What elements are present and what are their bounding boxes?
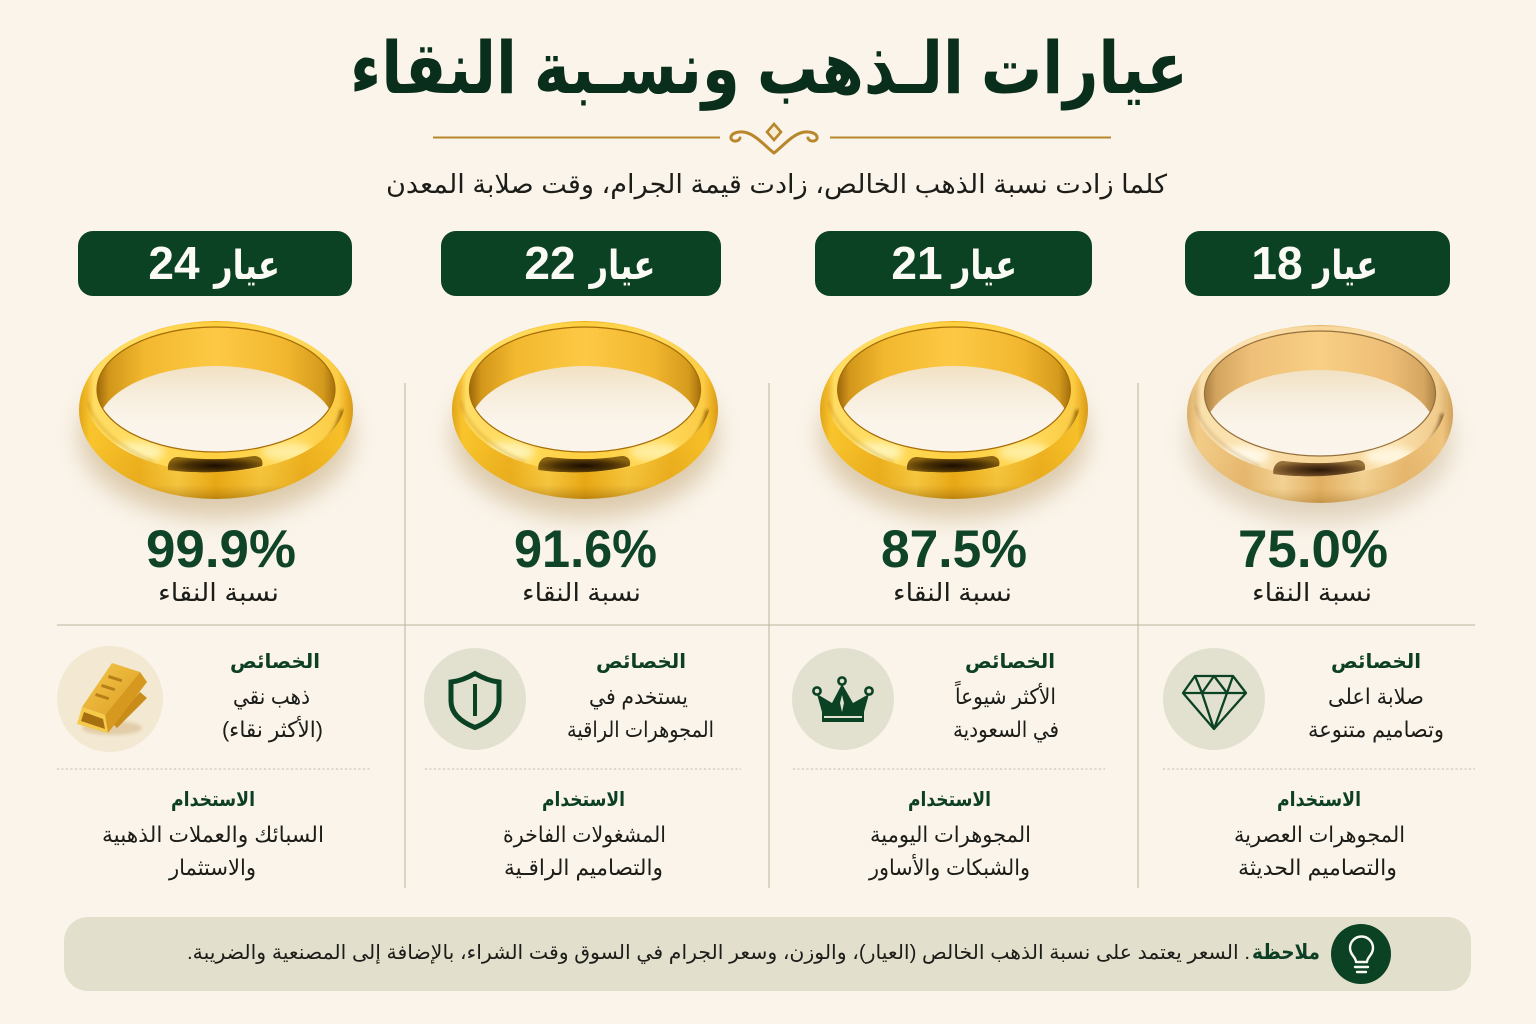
badge: 24 karat (78, 231, 352, 296)
icon: gold bar (57, 646, 163, 752)
note bar (64, 917, 1471, 991)
properties text (567, 684, 714, 742)
title: عيارات الـذهب ونسـبة النقاء (350, 29, 1188, 111)
properties text: المجوهرات الراقية (567, 717, 714, 742)
properties text: ذهب نقي (233, 684, 310, 710)
use text: المجوهرات اليومية (870, 822, 1031, 847)
properties text: صلابة اعلى (1328, 684, 1424, 709)
panel: 24 karat (57, 231, 353, 880)
badge: 21 karat: 21 (891, 237, 943, 289)
use text: المجوهرات العصرية (1234, 822, 1405, 847)
use text: والاستثمار (168, 855, 256, 880)
panel: 18 karat (1163, 231, 1453, 881)
use text (868, 822, 1031, 880)
percent: 99.9%: 99.9% (146, 520, 296, 579)
icon: diamond (1163, 648, 1265, 750)
use heading: الاستخدام (1277, 789, 1361, 811)
purity label: نسبة النقاء (1252, 579, 1372, 607)
use text: والتصاميم الراقـية (504, 855, 663, 881)
purity label: نسبة النقاء (522, 579, 641, 607)
properties text: يستخدم في (589, 684, 688, 710)
badge: 24 karat: عيار (212, 244, 280, 289)
panel: 21 karat (792, 231, 1092, 880)
purity label: نسبة النقاء (158, 579, 279, 607)
properties text: (الأكثر نقاء) (222, 716, 323, 742)
column dividers (57, 383, 1475, 888)
properties text: وتصاميم متنوعة (1308, 717, 1444, 743)
subtitle: كلما زادت نسبة الذهب الخالص، زادت قيمة الجرام، وقت صلابة المعدن (386, 169, 1168, 200)
badge: 22 karat (441, 231, 721, 296)
note label: ملاحظة (1252, 941, 1320, 964)
use text: المشغولات الفاخرة (503, 822, 666, 847)
properties text (953, 680, 1059, 743)
ring: 18 karat (1187, 325, 1453, 522)
ring: 22 karat (452, 321, 718, 518)
properties heading: الخصائص (230, 651, 320, 673)
note text: . السعر يعتمد على نسبة الذهب الخالص (العيار)، والوزن، وسعر الجرام في السوق وقت الشراء، بالإضافة إلى المصنعية والضريبة. (187, 942, 1250, 965)
use heading: الاستخدام (908, 789, 991, 811)
ring: 21 karat (820, 321, 1088, 518)
use text (102, 822, 324, 880)
badge: 21 karat (815, 231, 1092, 296)
purity label: نسبة النقاء (893, 579, 1012, 607)
properties text (222, 684, 323, 742)
icon: shield (424, 648, 526, 750)
properties heading: الخصائص (965, 651, 1055, 673)
badge: 21 karat: عيار (950, 244, 1017, 289)
icon: crown (792, 648, 894, 750)
properties text: في السعودية (953, 717, 1059, 743)
properties text (1308, 684, 1444, 743)
badge: 18 karat: عيار (1311, 244, 1378, 289)
use heading: الاستخدام (171, 789, 255, 811)
use text: والشبكات والأساور (868, 854, 1030, 880)
use text: والتصاميم الحديثة (1238, 855, 1397, 881)
percent: 75.0%: 75.0% (1238, 520, 1388, 579)
use heading: الاستخدام (542, 789, 625, 811)
badge: 22 karat: عيار (588, 244, 656, 289)
badge: 18 karat: 18 (1251, 237, 1303, 289)
use text: السبائك والعملات الذهبية (102, 822, 324, 847)
use text (1234, 822, 1405, 881)
badge: 22 karat: 22 (524, 237, 576, 289)
properties heading: الخصائص (1331, 651, 1421, 673)
properties text: الأكثر شيوعاً (955, 680, 1056, 709)
properties heading: الخصائص (596, 651, 686, 673)
badge: 24 karat: 24 (148, 237, 200, 289)
icon: light bulb (1331, 924, 1391, 984)
title ornament (433, 124, 1111, 153)
percent: 87.5%: 87.5% (881, 520, 1027, 579)
percent: 91.6%: 91.6% (514, 520, 657, 579)
panel: 22 karat (424, 231, 721, 881)
ring: 24 karat (79, 321, 353, 518)
badge: 18 karat (1185, 231, 1450, 296)
use text (503, 822, 666, 881)
